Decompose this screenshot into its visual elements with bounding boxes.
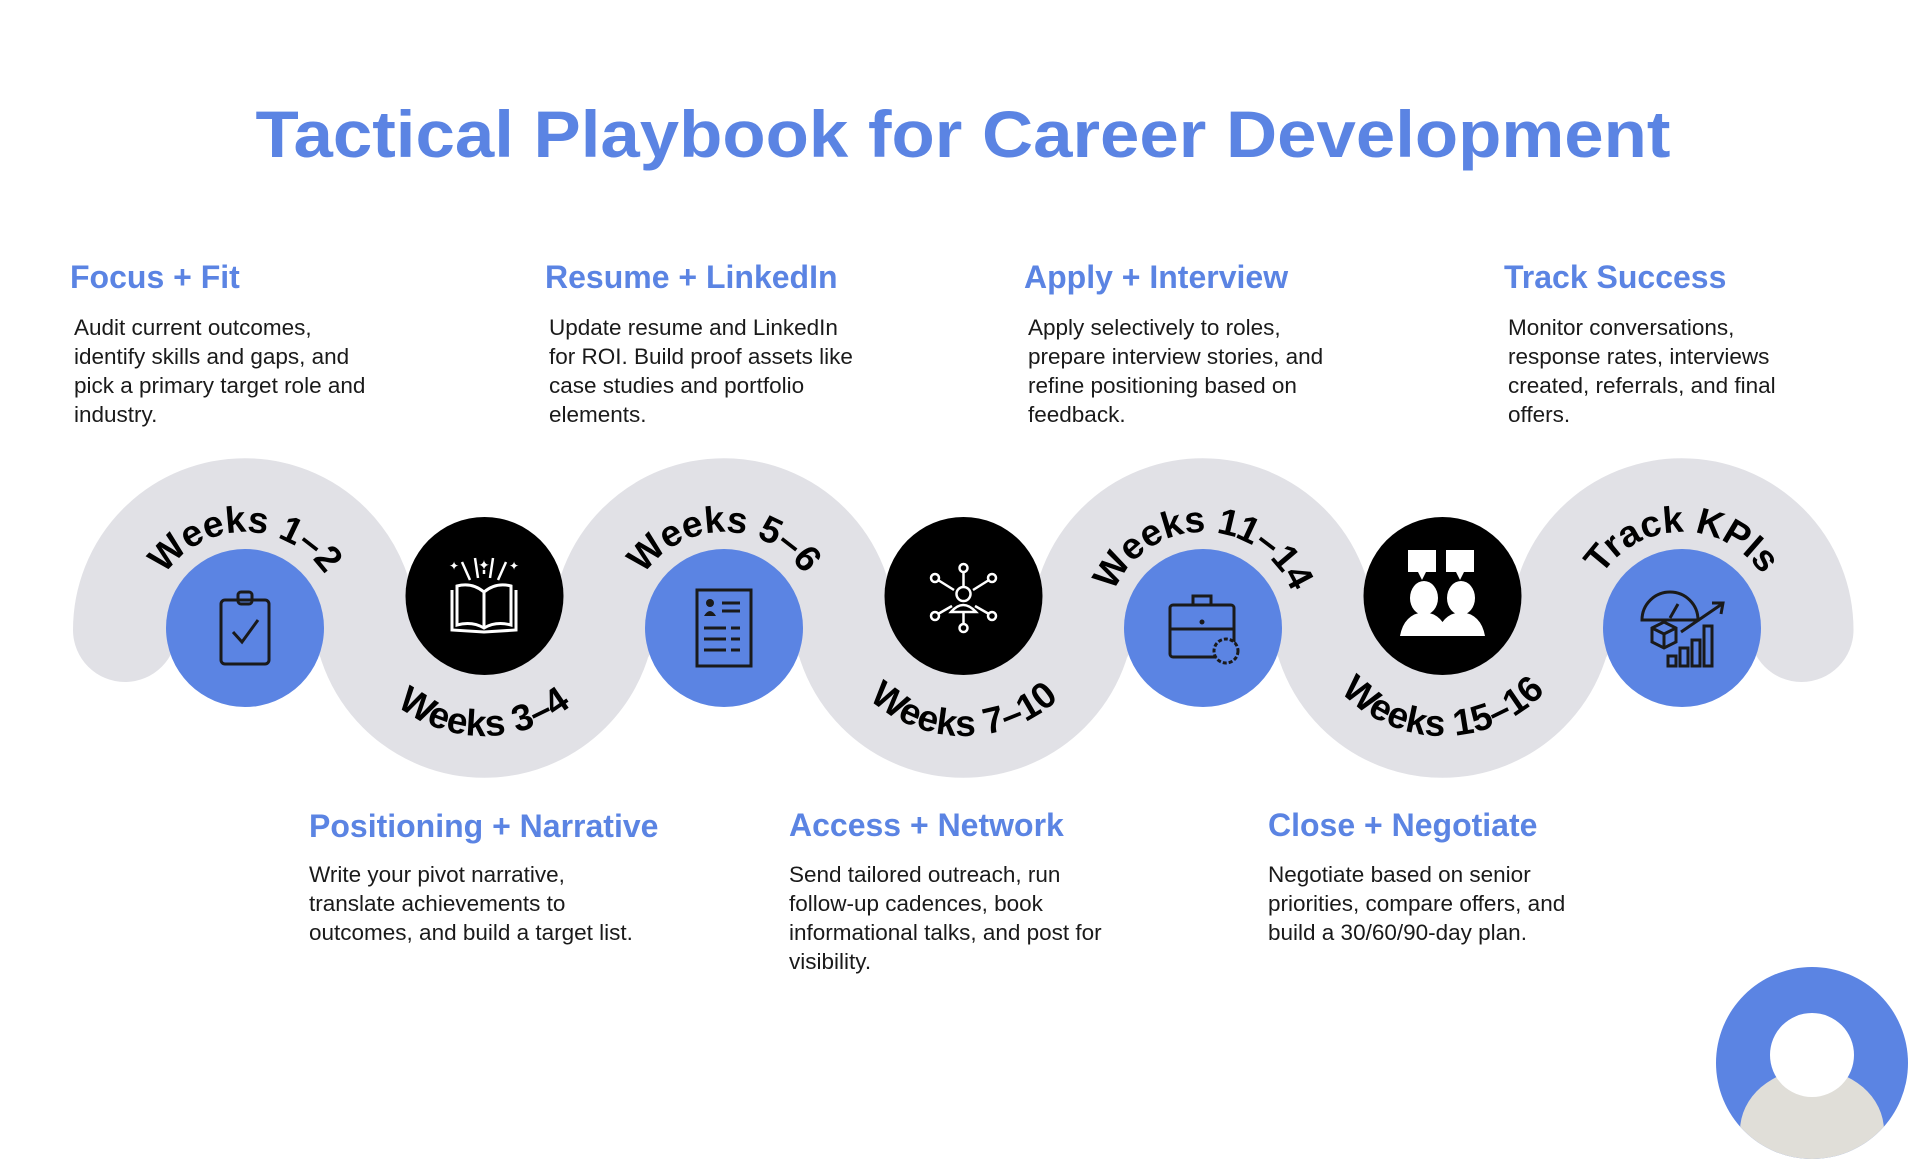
panel: Close + Negotiate [1268, 807, 1565, 945]
panel: Resume + LinkedIn: case studies and portfolio [549, 373, 804, 398]
label: Weeks 11-14: Weeks 11–14 [1091, 510, 1314, 590]
panel: Access + Network [789, 807, 1102, 974]
panel: Access + Network: follow-up cadences, book [789, 891, 1044, 916]
panel: Apply + Interview: Apply selectively to roles, [1028, 315, 1281, 340]
label: Track KPIs: Track KPIs [1582, 506, 1774, 572]
panel: Apply + Interview: prepare interview stories, and [1028, 344, 1323, 369]
label: Weeks 5-6: Weeks 5–6 [624, 506, 820, 570]
panel: Positioning + Narrative [309, 808, 658, 945]
label: Weeks 1-2: Weeks 1–2 [146, 506, 342, 574]
icon: avatar decoration [1716, 967, 1908, 1166]
panel: Track Success: Track Success [1504, 259, 1726, 295]
panel: Close + Negotiate: priorities, compare offers, and [1268, 891, 1565, 916]
timeline wave band [125, 510, 1802, 726]
panel: Access + Network: Access + Network [789, 807, 1064, 843]
panel: Focus + Fit: identify skills and gaps, and [74, 344, 349, 369]
icon: KPI gauge chart [1603, 549, 1761, 707]
panel: Apply + Interview: Apply + Interview [1024, 259, 1288, 295]
panel: Resume + LinkedIn: Resume + LinkedIn [545, 259, 838, 295]
panel: Positioning + Narrative: Write your pivot narrative, [309, 862, 565, 887]
icon: open book [406, 517, 564, 675]
icon: open book: ✦ [478, 559, 490, 574]
label: Weeks 15-16: Weeks 15–16 [1345, 672, 1542, 736]
panel: Apply + Interview [1024, 259, 1323, 427]
icon: network [884, 517, 1042, 675]
panel: Positioning + Narrative: Positioning + Narrative [309, 808, 658, 844]
icon: open book: ✦ [509, 559, 519, 573]
panel: Focus + Fit [70, 259, 365, 427]
panel: Track Success: offers. [1508, 402, 1570, 427]
panel: Access + Network: visibility. [789, 949, 871, 974]
panel: Apply + Interview: refine positioning based on [1028, 373, 1297, 398]
panel: Close + Negotiate: Negotiate based on senior [1268, 862, 1531, 887]
panel: Resume + LinkedIn [545, 259, 853, 427]
icon: briefcase [1124, 549, 1282, 707]
panel: Resume + LinkedIn: Update resume and LinkedIn [549, 315, 838, 340]
icon: resume [645, 549, 803, 707]
panel: Access + Network: informational talks, and post for [789, 920, 1102, 945]
panel: Focus + Fit: Focus + Fit [70, 259, 240, 295]
panel: Track Success: created, referrals, and final [1508, 373, 1776, 398]
panel: Positioning + Narrative: translate achievements to [309, 891, 565, 916]
label: Weeks 3-4: Weeks 3–4 [402, 684, 569, 736]
icon: clipboard check [166, 549, 324, 707]
panel: Resume + LinkedIn: for ROI. Build proof assets like [549, 344, 853, 369]
panel: Focus + Fit: pick a primary target role and [74, 373, 365, 398]
icon: two people talking [1364, 517, 1522, 675]
panel: Track Success [1504, 259, 1776, 427]
panel: Focus + Fit: Audit current outcomes, [74, 315, 312, 340]
title: Tactical Playbook for Career Development [256, 97, 1671, 171]
panel: Positioning + Narrative: outcomes, and build a target list. [309, 920, 633, 945]
icon: open book: ✦ [449, 559, 459, 573]
panel: Access + Network: Send tailored outreach, run [789, 862, 1060, 887]
panel: Focus + Fit: industry. [74, 402, 157, 427]
panel: Track Success: Monitor conversations, [1508, 315, 1734, 340]
panel: Close + Negotiate: Close + Negotiate [1268, 807, 1537, 843]
label: Weeks 7-10: Weeks 7–10 [874, 678, 1055, 736]
panel: Close + Negotiate: build a 30/60/90-day plan. [1268, 920, 1527, 945]
panel: Apply + Interview: feedback. [1028, 402, 1126, 427]
panel: Resume + LinkedIn: elements. [549, 402, 647, 427]
panel: Track Success: response rates, interviews [1508, 344, 1769, 369]
